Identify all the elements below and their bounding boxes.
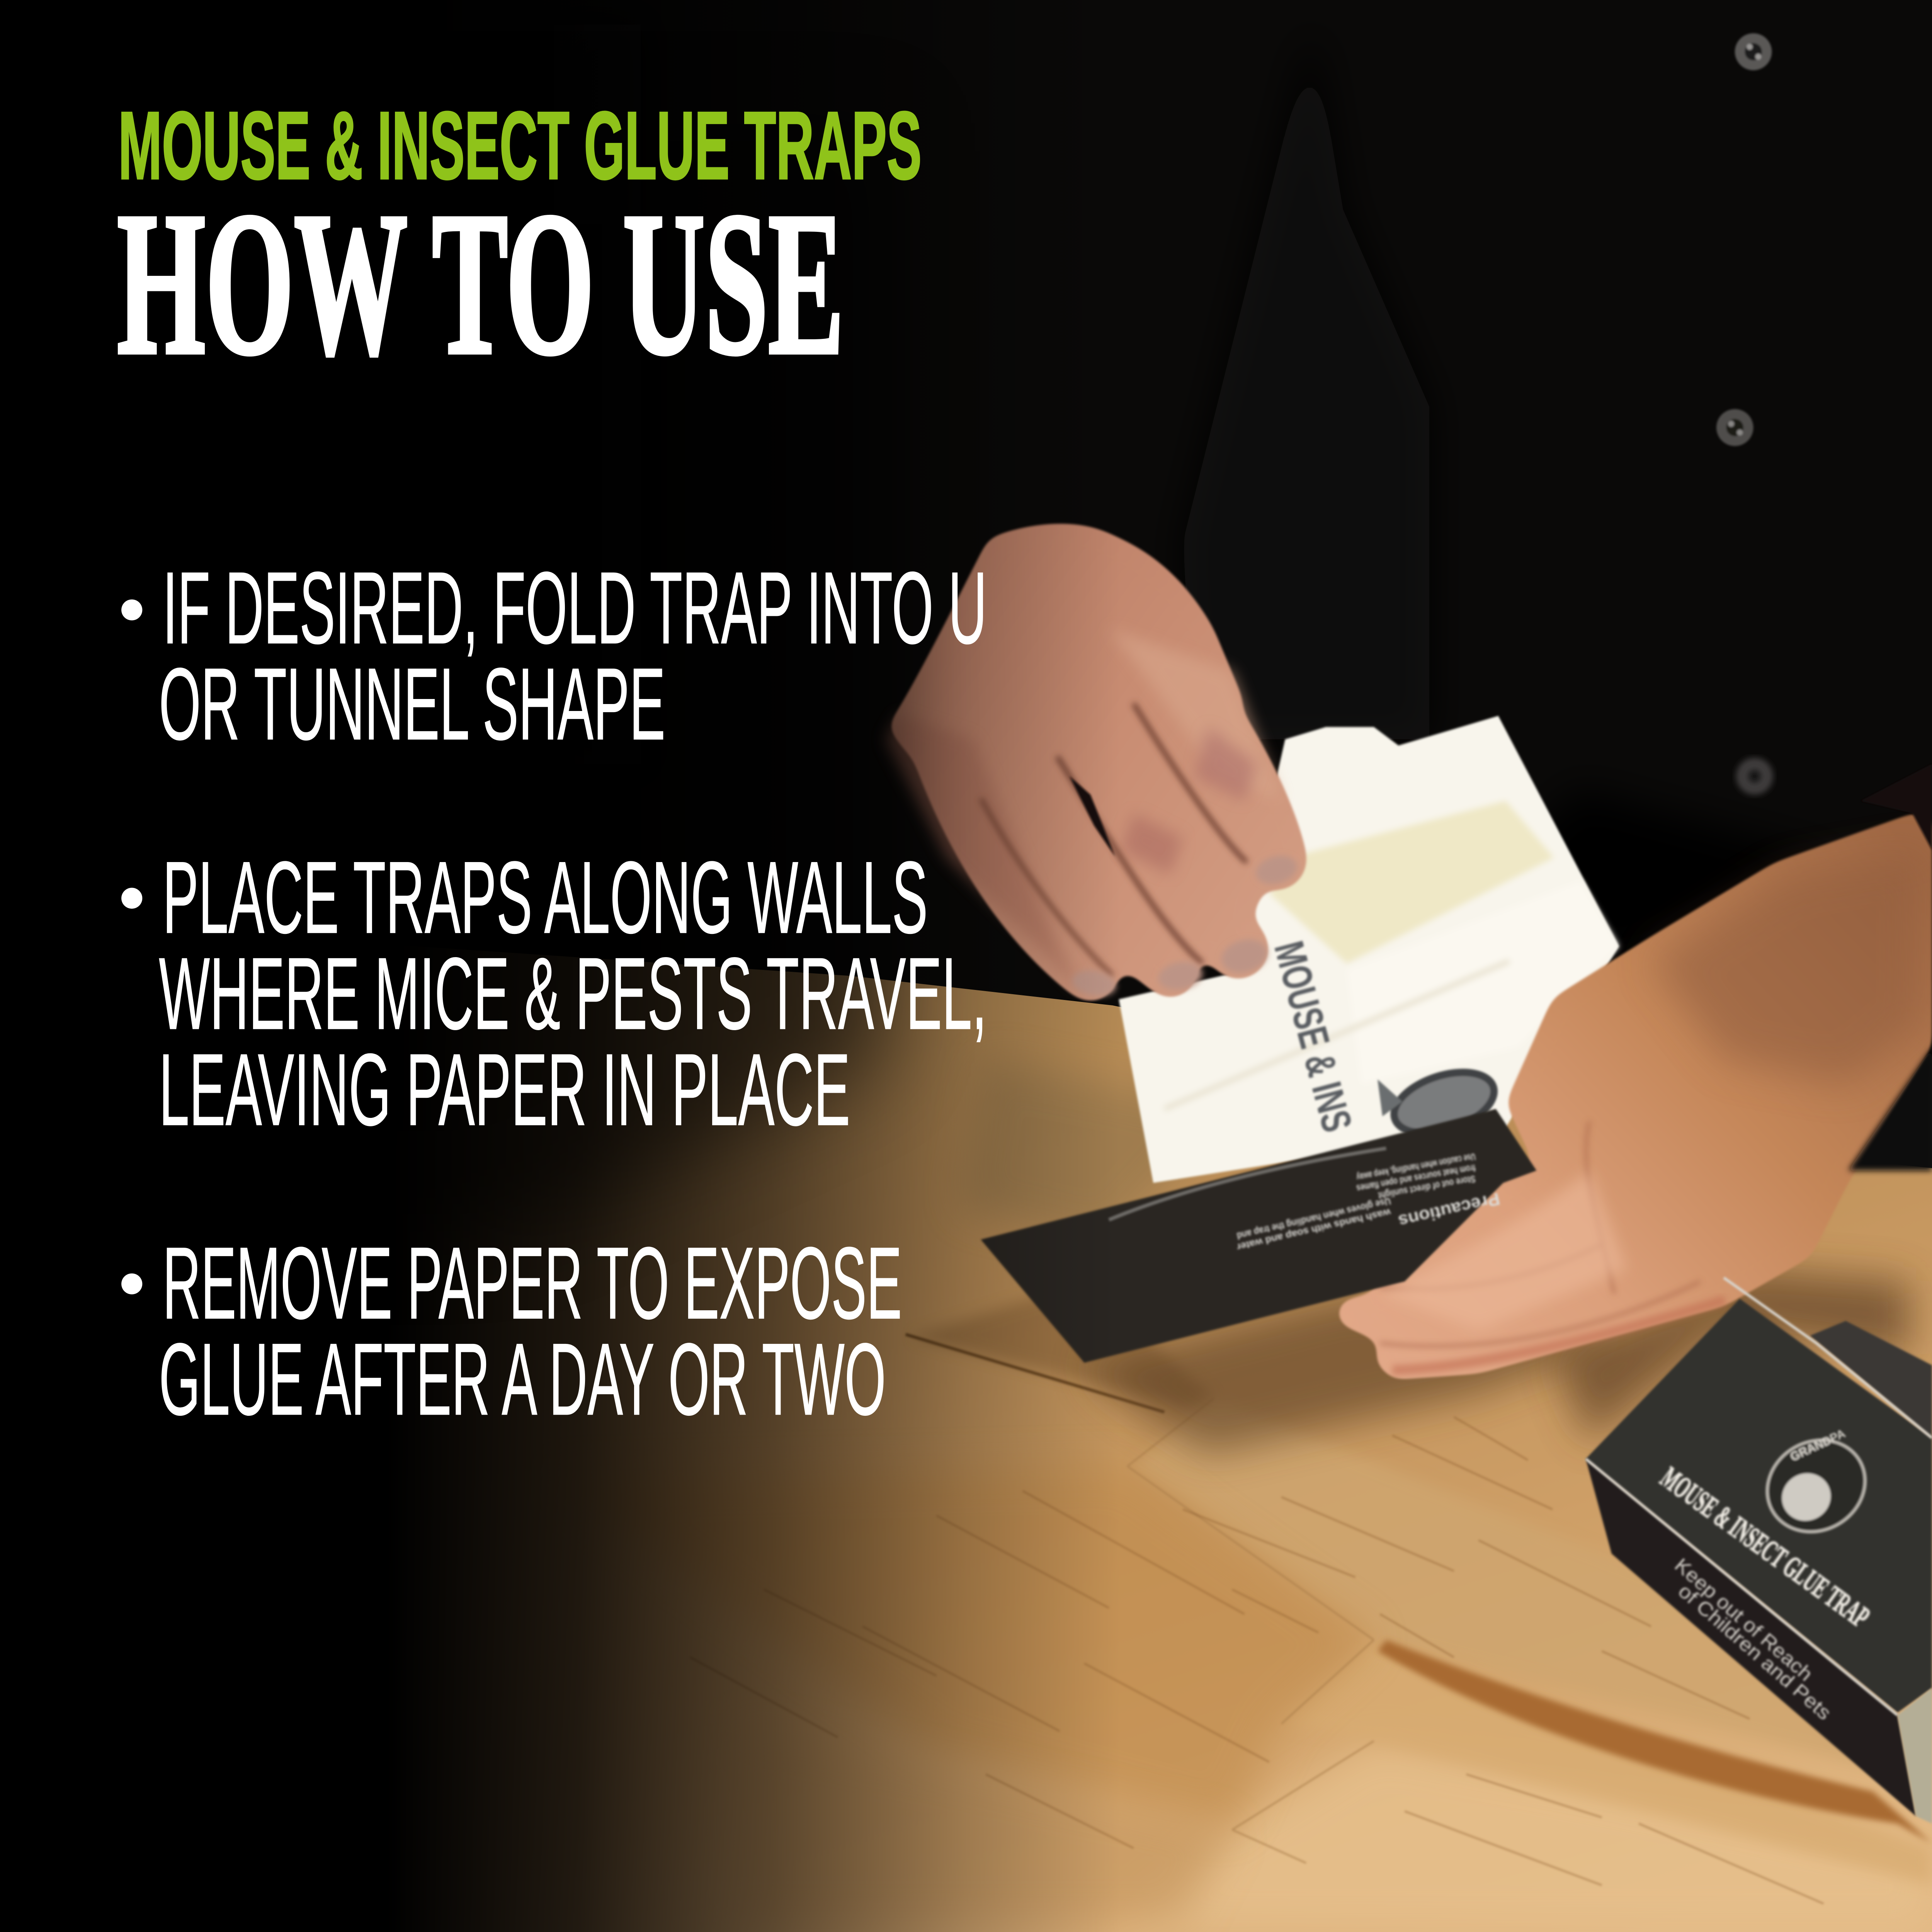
precautions text — [1236, 1151, 1502, 1252]
shirt buttons — [1716, 33, 1773, 795]
instructions list — [121, 551, 987, 1437]
finger gaps — [1134, 704, 1247, 862]
box side face — [1586, 1459, 1916, 1816]
finger nails — [1070, 851, 1300, 999]
step 3 — [121, 1226, 902, 1437]
step 2: PLACE TRAPS ALONG WALLS — [163, 840, 928, 955]
step 1: IF DESIRED, FOLD TRAP INTO U — [163, 551, 987, 665]
precautions text: from heat sources and open flames — [1355, 1162, 1476, 1194]
box warning: of Children and Pets — [1674, 1580, 1835, 1724]
glue trap box — [1586, 1278, 1932, 1823]
black backing paper — [981, 1109, 1536, 1363]
precautions text: Store out of direct sunlight — [1377, 1173, 1476, 1201]
precautions text: Use caution when handling, keep away — [1355, 1151, 1476, 1183]
precautions text: Precautions — [1396, 1189, 1502, 1231]
wood planks and grain — [554, 1060, 1932, 1932]
box logo — [1750, 1422, 1882, 1549]
box inner lid — [1810, 1321, 1932, 1438]
glue strip — [1269, 801, 1554, 964]
background photo — [433, 0, 1932, 1932]
box logo: GRANDPA — [1788, 1426, 1847, 1464]
trap logo — [1378, 1061, 1502, 1145]
step 2: WHERE MICE & PESTS TRAVEL, — [159, 937, 987, 1051]
box warning: Keep out of Reach — [1670, 1554, 1817, 1685]
box top face — [1586, 1299, 1932, 1713]
step 2 — [121, 840, 987, 1147]
wooden table — [0, 918, 1932, 1932]
trap label text: MOUSE & INS — [1265, 937, 1361, 1137]
subtitle: MOUSE & INSECT GLUE TRAPS — [118, 92, 922, 199]
step 1: OR TUNNEL SHAPE — [159, 647, 665, 761]
precautions text: wash hands with soap and water — [1236, 1206, 1392, 1252]
left hand — [885, 524, 1300, 999]
step 2: LEAVING PAPER IN PLACE — [159, 1032, 850, 1147]
precautions text: Use gloves when handling the trap and — [1236, 1196, 1392, 1242]
dark shirt and wall — [0, 0, 1932, 1232]
title: HOW TO USE — [117, 170, 844, 397]
step 1 — [121, 551, 987, 761]
right hand — [1337, 764, 1932, 1380]
step 3: REMOVE PAPER TO EXPOSE — [163, 1226, 902, 1340]
step 3: GLUE AFTER A DAY OR TWO — [159, 1322, 886, 1437]
shirt cuff — [1861, 764, 1932, 850]
white glue trap — [1119, 716, 1619, 1183]
box end — [1898, 1688, 1932, 1823]
heading — [117, 92, 922, 397]
